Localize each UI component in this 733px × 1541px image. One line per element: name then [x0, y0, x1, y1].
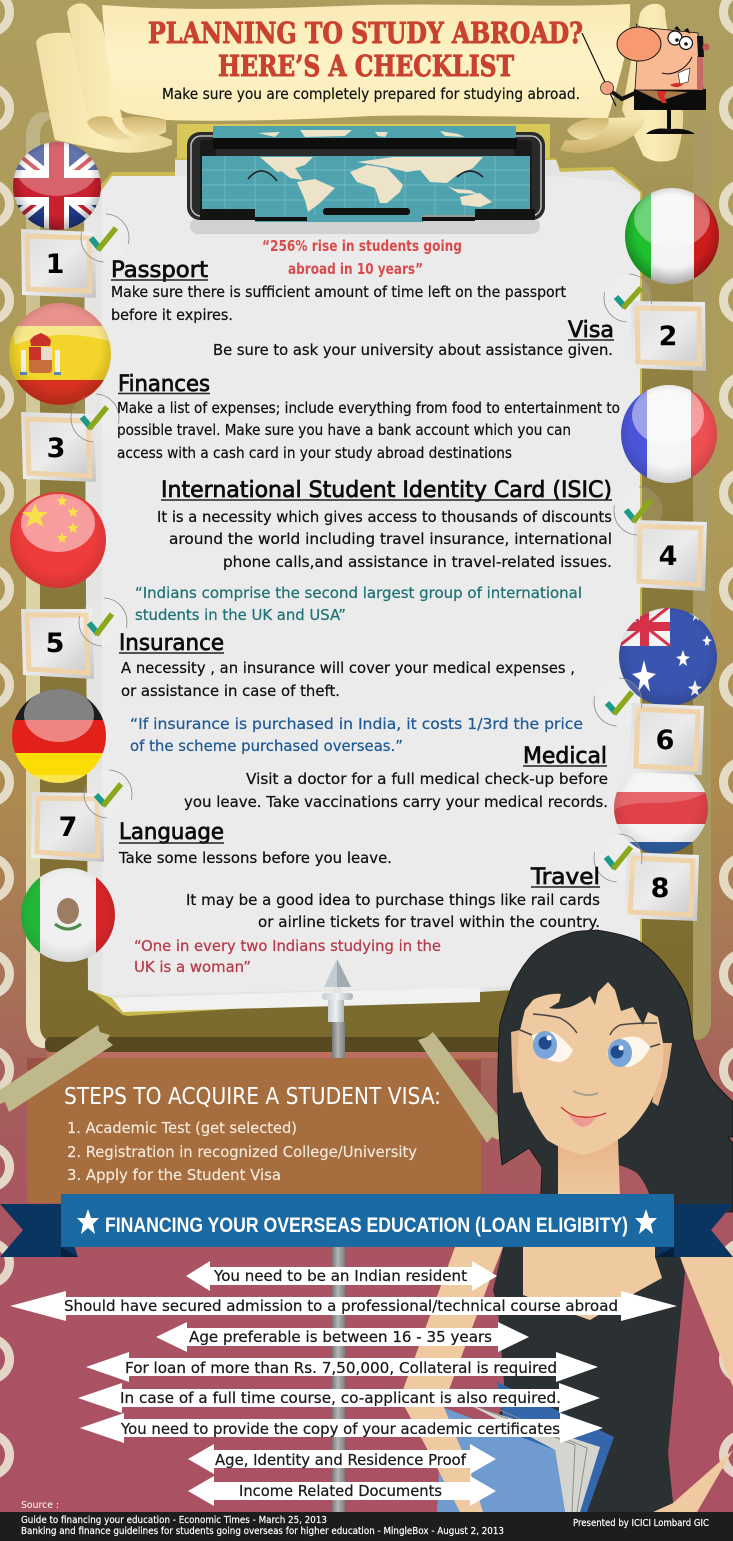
glasses	[668, 31, 682, 45]
right arm	[677, 1250, 733, 1387]
section: passport: Passport	[111, 258, 208, 283]
quote: insurance in India: of the scheme purchased overseas.”	[130, 737, 403, 755]
section: medical: you leave. Take vaccinations carry your medical records.	[184, 793, 608, 811]
note 7 with check	[31, 770, 132, 862]
eagle emblem	[55, 898, 81, 929]
quote: insurance in India	[130, 715, 583, 755]
continents	[258, 130, 492, 212]
source label: Source :	[21, 1500, 59, 1511]
note 5 with check: 5	[46, 628, 64, 659]
clipboard	[26, 112, 711, 1058]
section: finances: access with a cash card in your study abroad destinations	[117, 444, 512, 462]
section: medical: Visit a doctor for a full medical check-up before	[246, 770, 608, 788]
scroll banner	[36, 3, 683, 162]
section: visa: Visa	[568, 318, 614, 343]
curl right	[567, 117, 609, 140]
visa steps panel	[27, 1058, 481, 1203]
subtitle: Make sure you are completely prepared for studying abroad.	[162, 85, 580, 103]
quote: Indians second largest	[135, 584, 582, 624]
coat of arms	[20, 333, 61, 375]
note 2 with check	[604, 274, 706, 371]
arrow: collateral	[86, 1352, 598, 1382]
steps list: 3. Apply for the Student Visa	[67, 1166, 281, 1184]
note 1 with check	[21, 214, 129, 298]
arrow: collateral: For loan of more than Rs. 7,50,000, Collateral is required	[125, 1359, 557, 1377]
section: ISIC: around the world including travel insurance, international	[169, 530, 612, 548]
note 8 with check	[594, 834, 699, 921]
note 2 with check: 2	[659, 321, 677, 352]
section: medical	[184, 744, 608, 811]
quote: one in two	[134, 937, 441, 976]
arrow: certificates: You need to provide the copy of your academic certificates	[120, 1420, 560, 1438]
flag: Spain	[9, 303, 112, 405]
arrow: Indian resident: You need to be an Indian resident	[213, 1267, 467, 1285]
flag: Mexico	[21, 868, 115, 962]
section: language: Take some lessons before you leave.	[118, 849, 392, 867]
flag: United Kingdom	[13, 136, 101, 230]
note 5 with check	[21, 598, 127, 679]
arrow: age	[156, 1322, 529, 1352]
note 1 with check: 1	[46, 249, 64, 280]
section: travel	[186, 865, 600, 931]
flag: Costa Rica	[614, 772, 708, 854]
banner title: FINANCING YOUR OVERSEAS EDUCATION (LOAN ELIGIBITY)	[105, 1214, 628, 1237]
mouth	[662, 57, 692, 74]
flag: France	[620, 385, 718, 483]
arrow: income documents: Income Related Documents	[239, 1482, 442, 1500]
clip arcs	[248, 171, 483, 181]
lips	[561, 1107, 606, 1127]
teacher character	[582, 24, 710, 134]
right eye	[607, 1023, 660, 1067]
section: passport: Make sure there is sufficient amount of time left on the passport	[111, 283, 566, 301]
arrow: identity proof: Age, Identity and Residence Proof	[215, 1451, 467, 1469]
section: visa: Be sure to ask your university about assistance given.	[213, 341, 613, 359]
note 3 with check: 3	[47, 433, 65, 464]
title: HERE’S A CHECKLIST	[218, 49, 514, 83]
lower right arm	[653, 1450, 733, 1512]
star right	[635, 1209, 657, 1234]
sources: Guide to financing your education - Economic Times - March 25, 2013	[21, 1515, 327, 1526]
section: visa	[213, 318, 614, 359]
section: travel: or airline tickets for travel within the country.	[258, 913, 600, 931]
section: travel: It may be a good idea to purchase things like rail cards	[186, 891, 600, 909]
scroll body	[102, 4, 630, 121]
flag: Italy	[625, 188, 720, 284]
footer: Banking and finance guidelines for students going overseas for higher education - MingleBox - August 2, 2013	[21, 1526, 504, 1537]
section: ISIC: phone calls,and assistance in travel-related issues.	[223, 553, 612, 571]
quote: 256% rise: abroad in 10 years”	[288, 260, 423, 278]
section: insurance: A necessity , an insurance will cover your medical expenses ,	[121, 659, 575, 677]
forearm	[400, 1247, 503, 1512]
panel heading: STEPS TO ACQUIRE A STUDENT VISA:	[64, 1084, 441, 1110]
woman figure	[470, 930, 733, 1512]
section: finances	[117, 372, 620, 462]
title: PLANNING TO STUDY ABROAD?	[148, 16, 583, 50]
note 6 with check	[594, 678, 704, 775]
head	[635, 28, 703, 90]
arrow: age: Age preferable is between 16 - 35 years	[189, 1328, 492, 1346]
steps list: 2. Registration in recognized College/University	[67, 1143, 417, 1161]
face	[517, 982, 663, 1155]
note 6 with check: 6	[656, 725, 674, 756]
collar	[618, 1165, 650, 1197]
hair	[498, 930, 733, 1212]
curl left	[87, 116, 135, 140]
hair	[697, 36, 704, 57]
arrow: identity proof	[188, 1444, 496, 1474]
arm and hand	[612, 92, 635, 99]
section: travel: Travel	[530, 865, 600, 890]
quote: one in two: “One in every two Indians studying in the	[134, 937, 441, 955]
nose	[573, 1091, 598, 1095]
arrow: income documents	[188, 1476, 496, 1506]
footer	[0, 1500, 733, 1541]
legs and shoes	[667, 108, 671, 132]
dress	[470, 1247, 685, 1512]
presenter: Presented by ICICI Lombard GIC	[573, 1518, 709, 1529]
arrow: certificates	[80, 1413, 603, 1443]
section: ISIC	[157, 478, 612, 571]
section: insurance: or assistance in case of theft.	[121, 682, 340, 700]
book	[400, 1247, 614, 1512]
arrow: co-applicant: In case of a full time course, co-applicant is also required.	[120, 1389, 561, 1407]
nose	[617, 27, 661, 61]
middle fold left	[67, 3, 166, 139]
title	[148, 16, 583, 83]
note 8 with check: 8	[651, 873, 669, 904]
note 4 with check	[614, 487, 707, 591]
paper stack	[84, 124, 642, 1016]
quote: 256% rise: “256% rise in students going	[262, 237, 462, 255]
lower curl right	[560, 117, 645, 153]
back fold left	[36, 33, 172, 153]
star left	[77, 1209, 99, 1234]
section: medical: Medical	[523, 744, 607, 769]
flag: Germany	[12, 688, 107, 784]
quote: Indians second largest: students in the UK and USA”	[135, 606, 346, 624]
section: finances: Finances	[118, 372, 210, 397]
quote: Indians second largest: “Indians comprise the second largest group of international	[135, 584, 582, 602]
left eye	[520, 1014, 577, 1062]
ears	[511, 1030, 522, 1093]
steps list	[67, 1119, 417, 1184]
quote: 256% rise	[262, 237, 462, 278]
section: ISIC: It is a necessity which gives access to thousands of discounts	[157, 508, 612, 526]
section: insurance: Insurance	[119, 631, 224, 656]
tape right	[418, 1032, 509, 1143]
section: language: Language	[119, 820, 224, 845]
back fold right	[622, 4, 683, 162]
section: passport: before it expires.	[111, 306, 233, 324]
section: ISIC: International Student Identity Card (ISIC)	[161, 478, 612, 503]
arrow: co-applicant	[78, 1383, 600, 1413]
arrow: secured admission: Should have secured admission to a professional/technical course abroad	[64, 1297, 618, 1315]
flag: Australia	[619, 604, 718, 706]
body	[634, 89, 706, 110]
paper clip with world map	[187, 126, 545, 234]
map grid	[202, 156, 530, 215]
ribbon banner	[0, 1194, 733, 1257]
section: passport	[111, 258, 566, 324]
pointer	[582, 33, 616, 106]
quote: insurance in India: “If insurance is purchased in India, it costs 1/3rd the price	[130, 715, 583, 733]
neckline skin	[523, 1247, 662, 1320]
section: finances: Make a list of expenses; include everything from food to entertainment to	[117, 399, 620, 417]
neck	[558, 1140, 620, 1197]
flag: China	[10, 492, 106, 588]
arrow: secured admission	[10, 1291, 677, 1321]
note 3 with check	[21, 394, 119, 482]
tape left	[0, 1025, 113, 1112]
note 7 with check: 7	[59, 812, 77, 843]
clip bar	[213, 138, 517, 149]
quote: one in two: UK is a woman”	[134, 958, 251, 976]
steps list: 1. Academic Test (get selected)	[67, 1119, 297, 1137]
section: finances: possible travel. Make sure you have a bank account which you can	[117, 421, 571, 439]
stars	[632, 605, 712, 696]
section: insurance	[119, 631, 575, 700]
section: language	[118, 820, 392, 867]
stars	[22, 495, 78, 543]
clipboard pin	[322, 959, 353, 1512]
arrow: Indian resident	[186, 1261, 497, 1291]
note 4 with check: 4	[659, 541, 677, 572]
